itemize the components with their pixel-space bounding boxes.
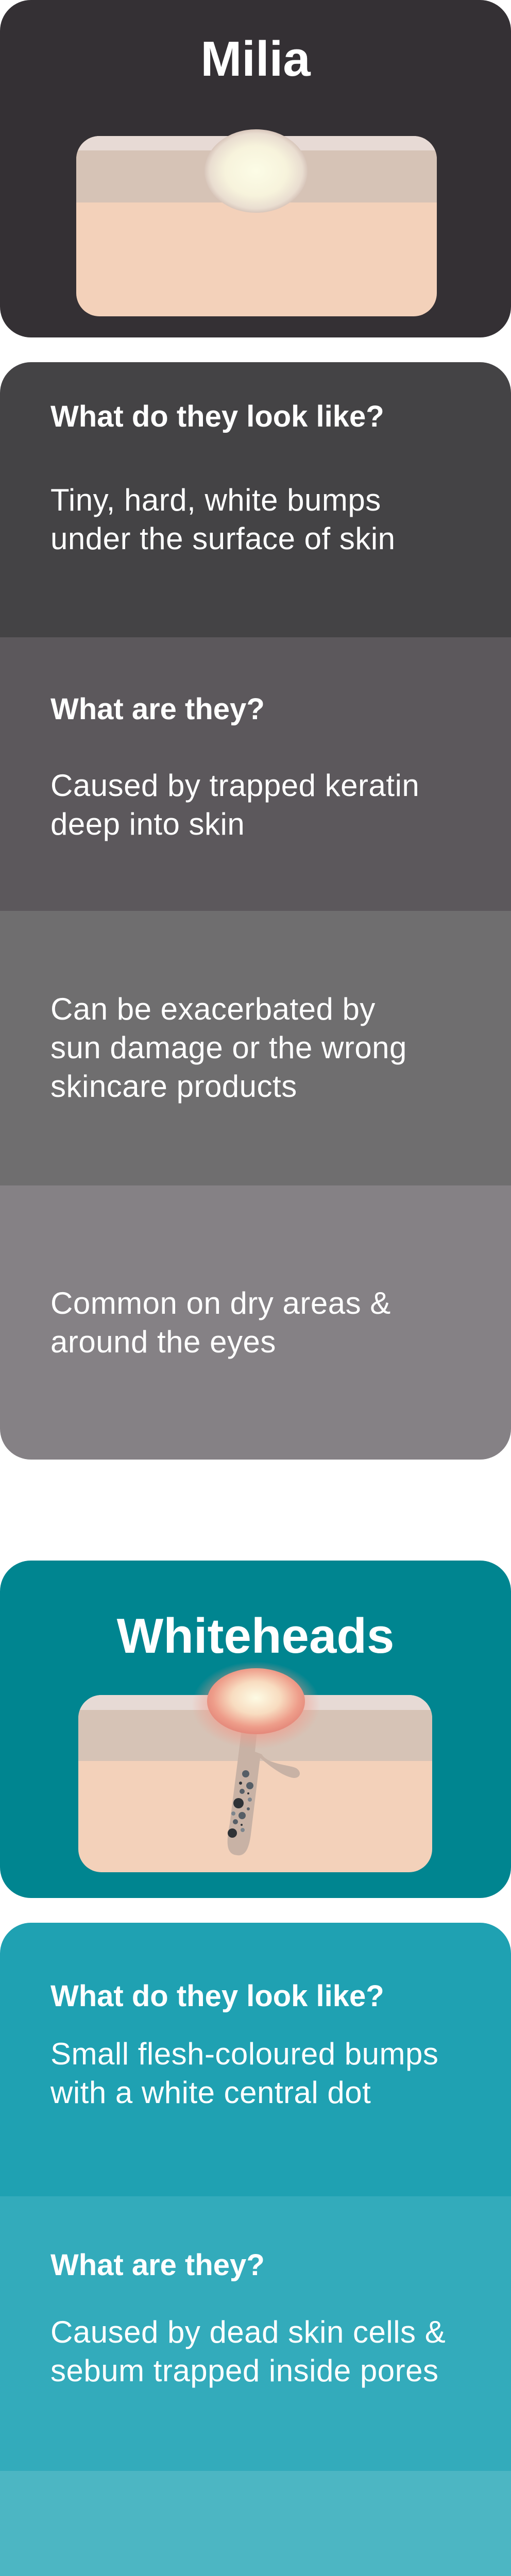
panel: milia info (0, 362, 511, 1460)
text: whiteheads cause (50, 2315, 446, 2388)
title: Milia: Milia (200, 31, 311, 87)
pore (228, 1726, 300, 1855)
text: milia exacerbated: Can be exacerbated by (50, 992, 376, 1026)
text: whiteheads cause: sebum trapped inside pores (50, 2353, 438, 2388)
text: milia look like (50, 483, 396, 556)
illustration: whitehead skin cross-section (78, 1662, 432, 1872)
text: milia common (50, 1286, 391, 1359)
text: milia cause: Caused by trapped keratin (50, 768, 419, 803)
text: whiteheads look like (50, 2037, 438, 2110)
text: milia exacerbated: skincare products (50, 1069, 297, 1104)
heading: whiteheads what are they: What are they? (50, 2248, 265, 2282)
text: milia look like: under the surface of skin (50, 521, 396, 556)
text: milia look like: Tiny, hard, white bumps (50, 483, 381, 517)
panel: whiteheads header (0, 1561, 511, 1898)
text: milia exacerbated: sun damage or the wrong (50, 1030, 407, 1065)
heading: milia what are they: What are they? (50, 692, 265, 726)
text: milia cause: deep into skin (50, 807, 245, 841)
panel: milia header (0, 0, 511, 337)
title: Whiteheads: Whiteheads (117, 1608, 394, 1664)
panel: whiteheads info (0, 1923, 511, 2576)
text: whiteheads look like: Small flesh-coloured bumps (50, 2037, 438, 2071)
text: milia common: Common on dry areas & (50, 1286, 391, 1320)
illustration: milia skin cross-section (76, 129, 437, 316)
text: milia exacerbated (50, 992, 407, 1104)
text: whiteheads look like: with a white central dot (50, 2075, 371, 2110)
text: milia common: around the eyes (50, 1325, 276, 1359)
heading: milia look like: What do they look like? (50, 400, 384, 433)
text: milia cause (50, 768, 419, 841)
text: whiteheads cause: Caused by dead skin cells & (50, 2315, 446, 2349)
heading: whiteheads look like: What do they look like? (50, 1979, 384, 2013)
